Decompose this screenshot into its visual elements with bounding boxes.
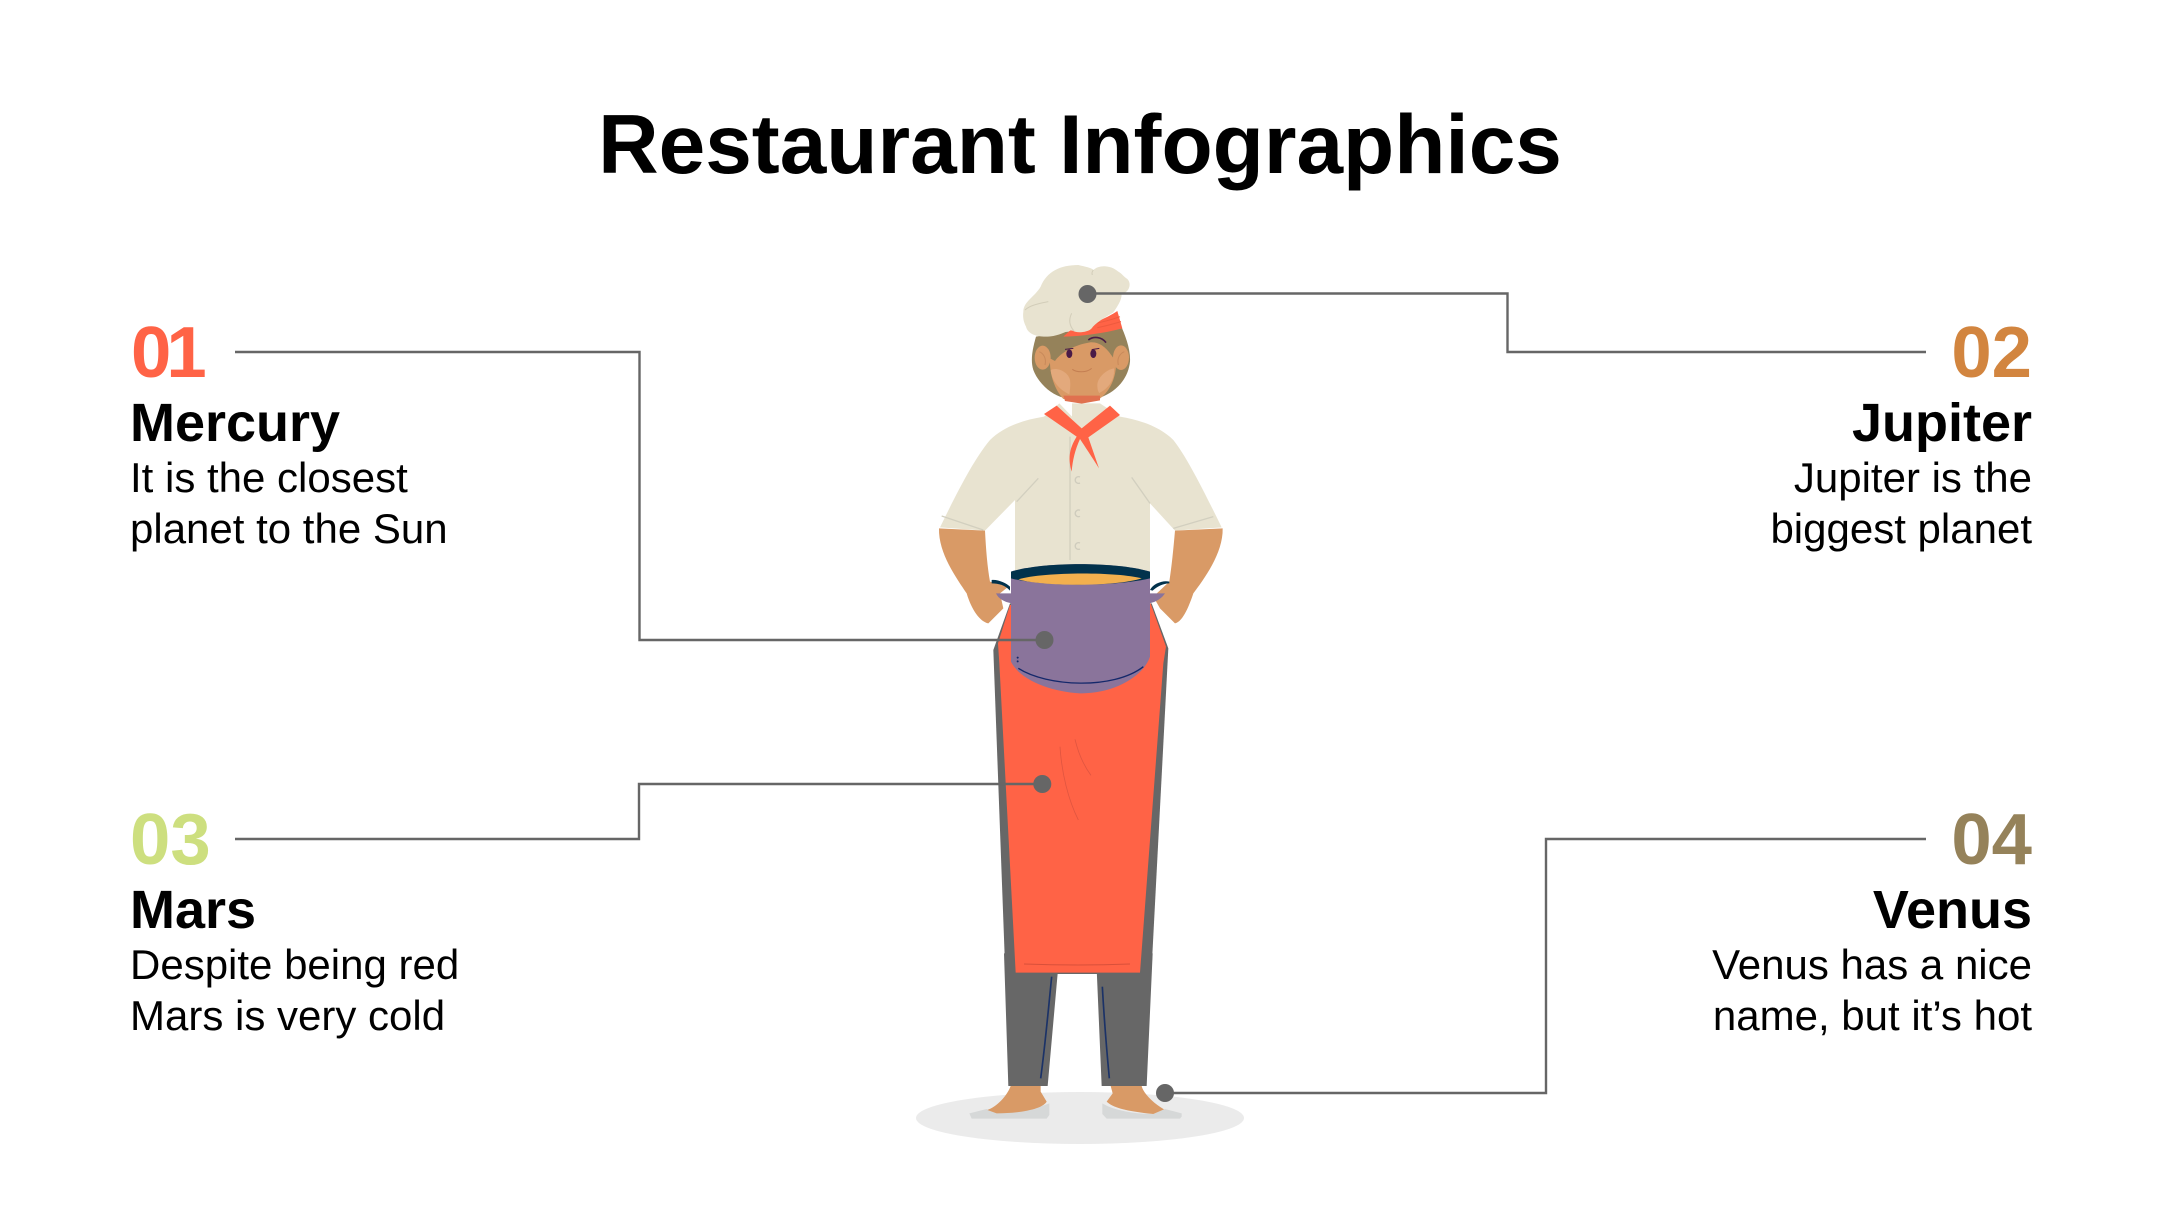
legs and feet xyxy=(969,953,1182,1119)
panel: 02 Jupiter: biggest planet xyxy=(1770,505,2032,552)
ears xyxy=(1035,346,1051,370)
face and chin xyxy=(1050,342,1116,399)
cheeks xyxy=(1051,369,1070,394)
panel: 01 Mercury xyxy=(130,312,448,552)
panel: 03 Mars: Despite being red xyxy=(130,941,459,988)
torso xyxy=(939,403,1223,623)
neck band xyxy=(1063,396,1100,404)
panel: 01 Mercury: It is the closest xyxy=(130,454,408,501)
panel: 02 Jupiter: 02 xyxy=(1951,312,2032,393)
chef jacket xyxy=(940,403,1222,573)
panel: 04 Venus: Venus has a nice xyxy=(1712,941,2032,988)
panel: 04 Venus: Venus xyxy=(1873,880,2032,940)
panel: 01 Mercury: Mercury xyxy=(130,393,340,453)
panel: 03 Mars: Mars is very cold xyxy=(130,992,445,1039)
apron xyxy=(993,603,1168,974)
head xyxy=(1023,265,1130,404)
arms xyxy=(939,528,1008,623)
panel: 03 Mars: Mars xyxy=(130,880,256,940)
title: Restaurant Infographics xyxy=(598,97,1562,191)
panel: 01 Mercury: 01 xyxy=(131,312,205,393)
connector lines with dots xyxy=(235,294,1926,1093)
smile xyxy=(1072,368,1092,372)
panel: 02 Jupiter: Jupiter is the xyxy=(1794,454,2032,501)
panel: 04 Venus: 04 xyxy=(1951,799,2032,880)
eyes and brows xyxy=(1066,349,1072,358)
chef illustration xyxy=(916,265,1244,1144)
dots xyxy=(1033,285,1174,1102)
hair xyxy=(1032,323,1130,398)
chef hat xyxy=(1023,265,1130,337)
panel: 03 Mars: 03 xyxy=(130,799,211,880)
neck scarf xyxy=(1044,406,1120,472)
panel: 02 Jupiter xyxy=(1770,312,2032,552)
panel: 02 Jupiter: Jupiter xyxy=(1852,393,2032,453)
panel: 01 Mercury: planet to the Sun xyxy=(130,505,448,552)
panel: 04 Venus: name, but it’s hot xyxy=(1713,992,2032,1039)
cooking pot xyxy=(992,564,1169,693)
panel: 03 Mars xyxy=(130,799,459,1039)
floor shadow xyxy=(916,1092,1244,1144)
headband xyxy=(1063,311,1122,337)
panel: 04 Venus xyxy=(1712,799,2032,1039)
